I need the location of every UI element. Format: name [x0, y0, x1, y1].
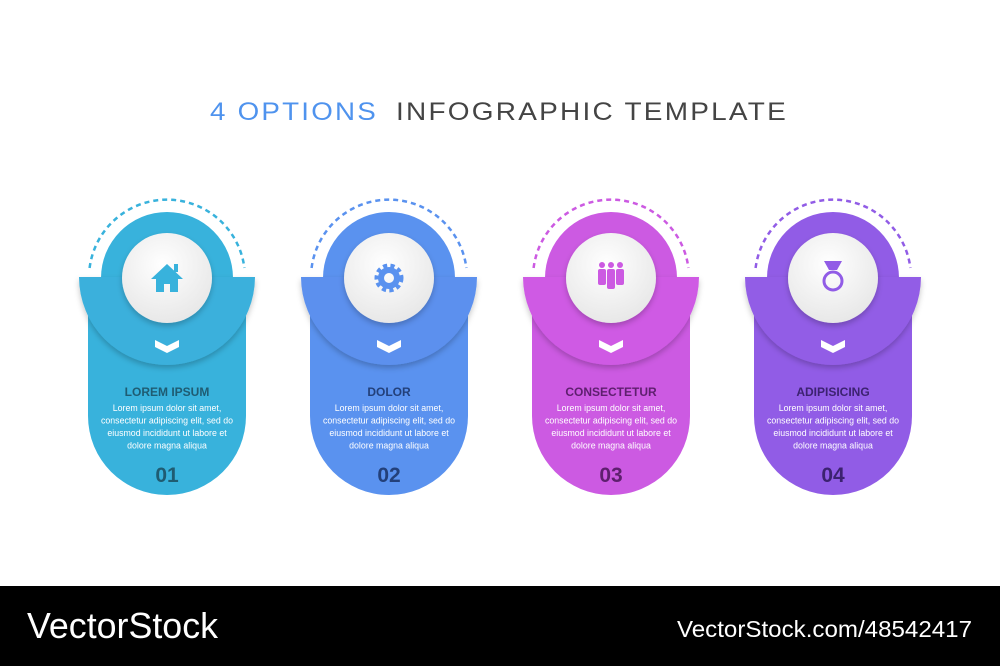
heading: LOREM IPSUM — [125, 385, 209, 399]
icon: medal — [824, 261, 842, 290]
number: 02 — [377, 464, 401, 487]
body text: eiusmod incididunt ut labore et — [773, 428, 893, 438]
card 1: lorem ipsum — [79, 200, 255, 495]
body text: dolore magna aliqua — [571, 440, 651, 450]
title — [210, 98, 788, 126]
heading: DOLOR — [367, 385, 411, 399]
number: 01 — [155, 464, 179, 487]
body text: dolore magna aliqua — [127, 440, 207, 450]
body text: consectetur adipiscing elit, sed do — [545, 416, 677, 426]
body text — [545, 403, 677, 450]
title: 4 OPTIONS — [210, 98, 378, 126]
body text: dolore magna aliqua — [349, 440, 429, 450]
body text: Lorem ipsum dolor sit amet, — [779, 403, 887, 413]
body text — [323, 403, 455, 450]
body text: eiusmod incididunt ut labore et — [329, 428, 449, 438]
body text — [101, 403, 233, 450]
icon: gear — [377, 266, 401, 290]
chevron — [155, 340, 179, 353]
body text: dolore magna aliqua — [793, 440, 873, 450]
card 4: adipisicing — [745, 200, 921, 495]
chevron — [377, 340, 401, 353]
body text: eiusmod incididunt ut labore et — [551, 428, 671, 438]
chevron — [821, 340, 845, 353]
icon: house — [151, 264, 183, 292]
card 3: consectetur — [523, 200, 699, 495]
footer bar: VectorStock.com/48542417 — [677, 616, 972, 642]
body text: Lorem ipsum dolor sit amet, — [557, 403, 665, 413]
footer bar: VectorStock — [27, 605, 219, 646]
title: INFOGRAPHIC TEMPLATE — [396, 98, 788, 126]
footer bar — [0, 586, 1000, 666]
heading: ADIPISICING — [796, 385, 870, 399]
body text: consectetur adipiscing elit, sed do — [323, 416, 455, 426]
number: 04 — [821, 464, 845, 487]
body text: consectetur adipiscing elit, sed do — [101, 416, 233, 426]
body text: Lorem ipsum dolor sit amet, — [113, 403, 221, 413]
card 2: dolor — [301, 200, 477, 495]
number: 03 — [599, 464, 623, 487]
body text: consectetur adipiscing elit, sed do — [767, 416, 899, 426]
body text: Lorem ipsum dolor sit amet, — [335, 403, 443, 413]
body text — [767, 403, 899, 450]
heading: CONSECTETUR — [565, 385, 657, 399]
body text: eiusmod incididunt ut labore et — [107, 428, 227, 438]
icon: people — [598, 262, 624, 289]
chevron — [599, 340, 623, 353]
